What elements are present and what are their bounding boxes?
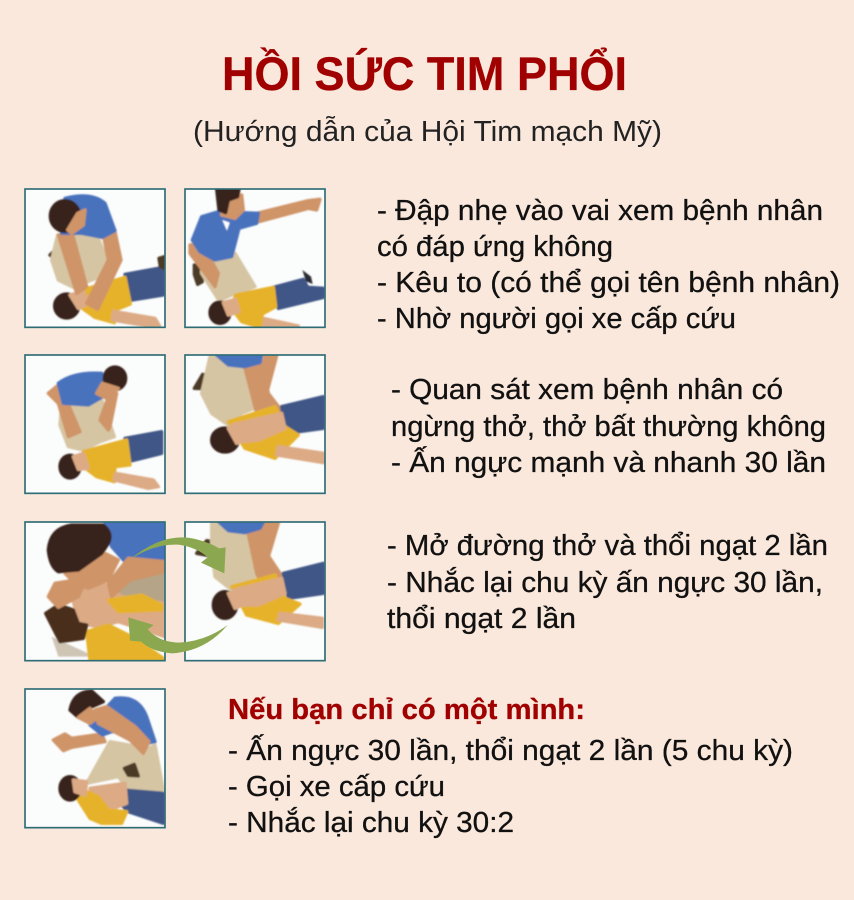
panel: chest compressions — [185, 355, 325, 493]
text block: step 1 — [377, 195, 840, 335]
text block: if you are alone: - Gọi xe cấp cứu — [228, 771, 445, 803]
panel: shouting for help, pointing — [185, 189, 325, 327]
arrow: cycle arrow, compressions to rescue breaths — [128, 617, 228, 653]
arrow: cycle arrow, rescue breaths to compressions — [130, 537, 226, 573]
text block: if you are alone: - Ấn ngực 30 lần, thổi ngạt 2 lần (5 chu kỳ) — [228, 733, 793, 767]
text block: step 1: - Đập nhẹ vào vai xem bệnh nhân — [377, 195, 823, 227]
heading: if you are alone: Nếu bạn chỉ có một mình: — [228, 694, 585, 726]
text block: step 2: - Ấn ngực mạnh và nhanh 30 lần — [391, 445, 826, 479]
illustrations: rows 3 and 4 — [25, 522, 325, 828]
illustrations: rows 1 and 2 — [25, 189, 325, 493]
panel: compressions in cycle — [185, 522, 325, 661]
text block: step 1: có đáp ứng không — [377, 231, 613, 263]
text block: step 3: - Nhắc lại chu kỳ ấn ngực 30 lần, — [387, 566, 823, 599]
subtitle: (Hướng dẫn của Hội Tim mạch Mỹ) — [193, 115, 662, 148]
text block: step 3 — [387, 530, 828, 635]
text block: step 1: - Nhờ người gọi xe cấp cứu — [377, 303, 736, 335]
panel: rescue breathing close-up — [25, 522, 165, 661]
text block: step 2 — [391, 374, 826, 479]
text block: if you are alone — [228, 694, 793, 839]
text block: if you are alone: - Nhắc lại chu kỳ 30:2 — [228, 806, 514, 839]
text block: step 2: - Quan sát xem bệnh nhân có — [391, 374, 783, 406]
text block: step 2: ngừng thở, thở bất thường không — [391, 411, 826, 443]
panel: checking breathing — [25, 355, 165, 493]
title: HỒI SỨC TIM PHỔI — [222, 47, 627, 100]
text block: step 3: - Mở đường thở và thổi ngạt 2 lần — [387, 530, 828, 562]
panel: calling for emergency help while alone — [25, 689, 165, 828]
text block: step 3: thổi ngạt 2 lần — [387, 603, 576, 635]
panel: checking response, tapping shoulder — [25, 189, 165, 327]
text block: step 1: - Kêu to (có thể gọi tên bệnh nhân) — [377, 267, 840, 299]
